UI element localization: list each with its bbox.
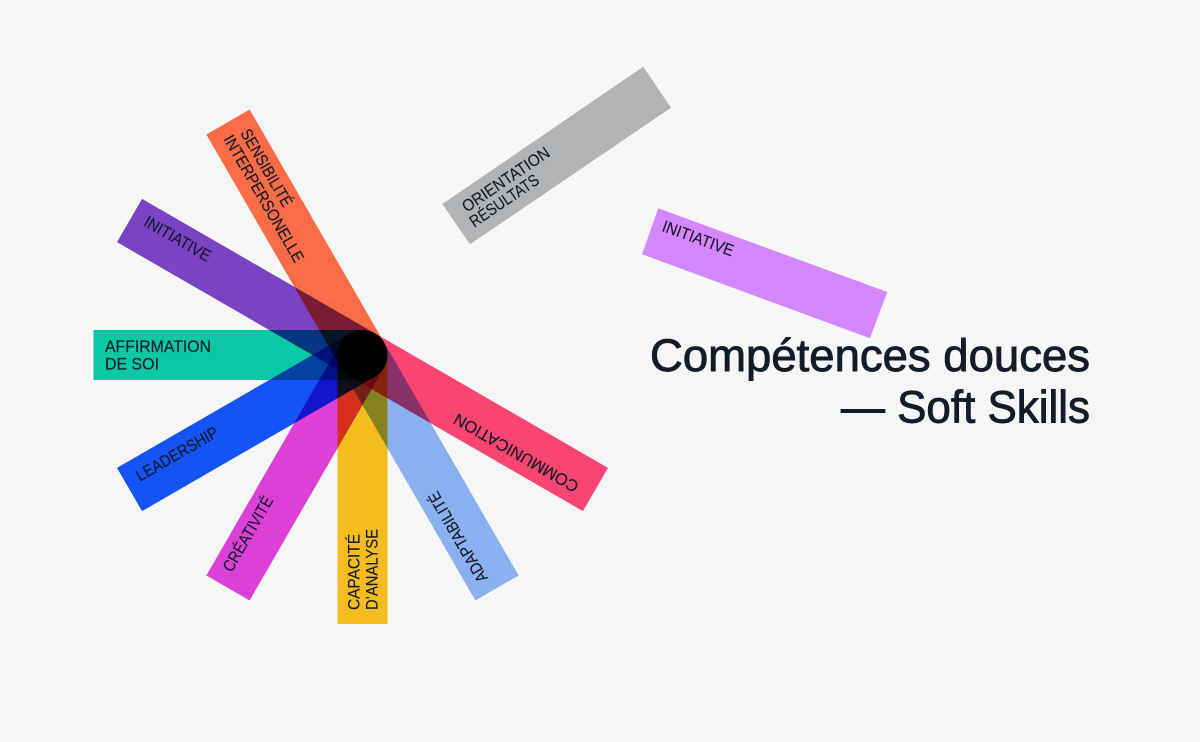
bar: créativité	[206, 342, 384, 600]
floating bar: orientation résultats: ORIENTATION	[459, 144, 553, 216]
bar: adaptabilité: ADAPTABILITÉ	[424, 488, 492, 586]
central hub circle	[338, 330, 388, 380]
bar: sensibilité interpersonelle: INTERPERSONELLE	[220, 132, 307, 266]
bar: affirmation de soi: AFFIRMATION	[105, 338, 211, 356]
floating bar: initiative (lilac)	[642, 208, 887, 338]
bar: leadership: LEADERSHIP	[133, 424, 222, 485]
bar: adaptabilité	[341, 342, 519, 600]
bar: sensibilité interpersonelle	[206, 110, 384, 367]
title	[650, 330, 1090, 432]
title: — Soft Skills	[841, 382, 1090, 432]
bar: initiative (violet): INITIATIVE	[141, 213, 214, 265]
title: Compétences douces	[650, 330, 1090, 381]
bar: capacité d'analyse: D’ANALYSE	[364, 529, 382, 610]
floating bar: orientation résultats	[442, 67, 671, 244]
bar: initiative (violet)	[117, 199, 375, 377]
bar: communication: COMMUNICATION	[451, 409, 582, 495]
bar: communication	[350, 333, 608, 511]
bar: affirmation de soi	[94, 330, 362, 380]
radial wheel of skill bars	[94, 110, 608, 624]
floating bar: initiative (lilac): INITIATIVE	[660, 218, 736, 260]
bar: créativité: CRÉATIVITÉ	[219, 493, 277, 575]
bar: capacité d'analyse	[338, 355, 388, 624]
bar: leadership	[117, 333, 375, 511]
bar: affirmation de soi: DE SOI	[105, 356, 159, 374]
bar: sensibilité interpersonelle: SENSIBILITÉ	[237, 126, 296, 210]
floating bar: orientation résultats: RÉSULTATS	[466, 170, 543, 231]
bar: capacité d'analyse: CAPACITÉ	[344, 534, 364, 610]
